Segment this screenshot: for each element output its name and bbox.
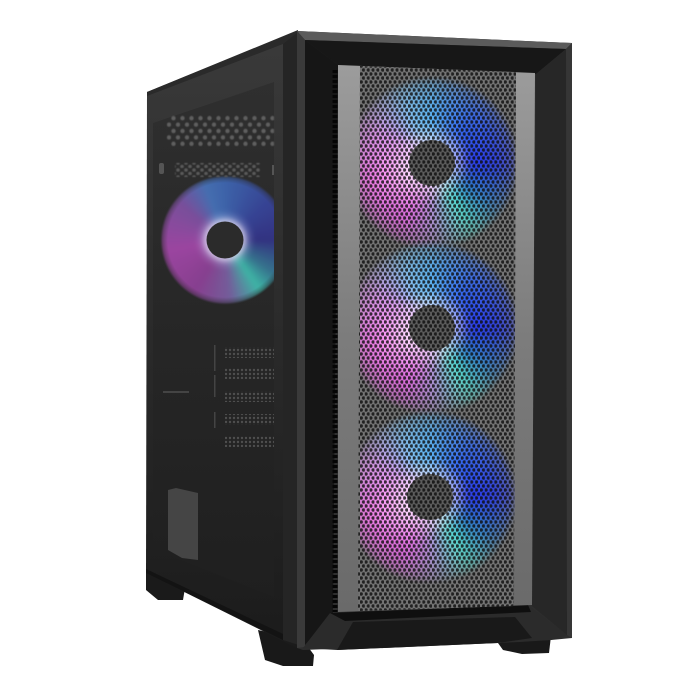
power supply shape bbox=[168, 488, 198, 560]
rear foot bbox=[146, 570, 185, 600]
front bottom bezel bbox=[303, 605, 567, 650]
front fan top bbox=[360, 77, 515, 248]
mesh backing bbox=[358, 66, 516, 611]
tray marks bbox=[163, 345, 216, 428]
front right foot bbox=[498, 636, 551, 654]
left edge vents bbox=[332, 70, 338, 612]
front fans, clipped to mesh bbox=[360, 77, 515, 582]
side frame pillar bbox=[283, 33, 305, 647]
front grey panel bbox=[338, 65, 535, 612]
front frame bbox=[297, 31, 572, 650]
hub mesh bbox=[407, 140, 455, 520]
side window fan bbox=[160, 176, 274, 304]
front fan middle bbox=[360, 242, 515, 413]
side top vent dots bbox=[167, 115, 274, 147]
side small slots bbox=[159, 163, 274, 175]
fan hubs bbox=[407, 140, 455, 520]
side fan hub bbox=[206, 222, 244, 258]
front fan bottom bbox=[360, 411, 515, 582]
side panel bbox=[146, 30, 298, 648]
front mesh bbox=[358, 66, 516, 611]
motherboard tray vents bbox=[225, 347, 274, 447]
side upper slot row bbox=[175, 163, 260, 177]
front left foot bbox=[258, 630, 314, 666]
